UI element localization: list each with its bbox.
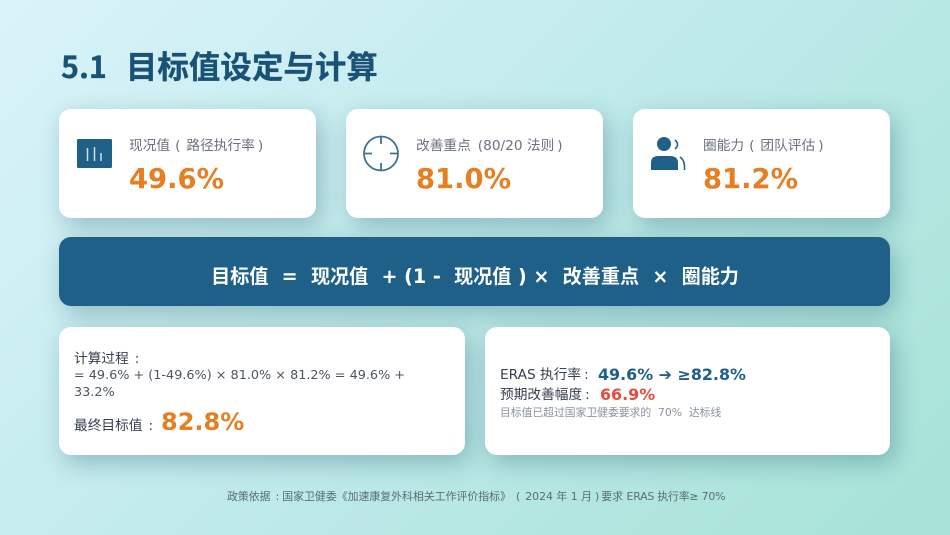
icon: target [363, 136, 399, 172]
label: circle capability: 圈能力 ( 团队评估) [703, 138, 824, 154]
expected improvement value: 66.9% [600, 385, 655, 404]
panel: current value [59, 109, 316, 218]
panel: calculation [59, 327, 465, 455]
formula text: 目标值 = 现况值 + (1 - 现况值 ) × 改善重点 × 圈能力 [211, 265, 739, 288]
calculation heading: 计算过程 : [74, 351, 139, 367]
footer policy note: 政策依据 : 国家卫健委《加速康复外科相关工作评价指标》 ( 2024 年 1 月 )要求 ERAS 执行率≥ 70% [227, 490, 725, 503]
panel: circle capability [633, 109, 890, 218]
ERAS rate label: ERAS 执行率: [500, 367, 589, 383]
icon: team person [651, 137, 686, 170]
formula banner [59, 237, 890, 306]
label: improvement focus: 改善重点 (80/20 法则) [416, 138, 563, 154]
final target label: 最终目标值 : [74, 418, 153, 434]
ERAS rate value: 49.6% ➔ ≥82.8% [598, 365, 746, 384]
label: current value: 现况值 ( 路径执行率) [129, 138, 263, 154]
panel: ERAS result [485, 327, 890, 455]
title: 5.1 目标值设定与计算 [61, 42, 378, 88]
final target value: 82.8% [161, 408, 244, 436]
note: 目标值已超过国家卫健委要求的 70% 达标线 [500, 406, 721, 419]
value: circle capability: 81.2% [703, 164, 798, 195]
icon: bar chart [77, 139, 112, 168]
value: current value: 49.6% [129, 164, 224, 195]
expected improvement label: 预期改善幅度: [500, 387, 590, 403]
panel: improvement focus [346, 109, 603, 218]
calculation steps: = 49.6% + (1-49.6%) × 81.0% × 81.2% = 49.6% + 33.2% [74, 368, 405, 400]
value: improvement focus: 81.0% [416, 164, 511, 195]
